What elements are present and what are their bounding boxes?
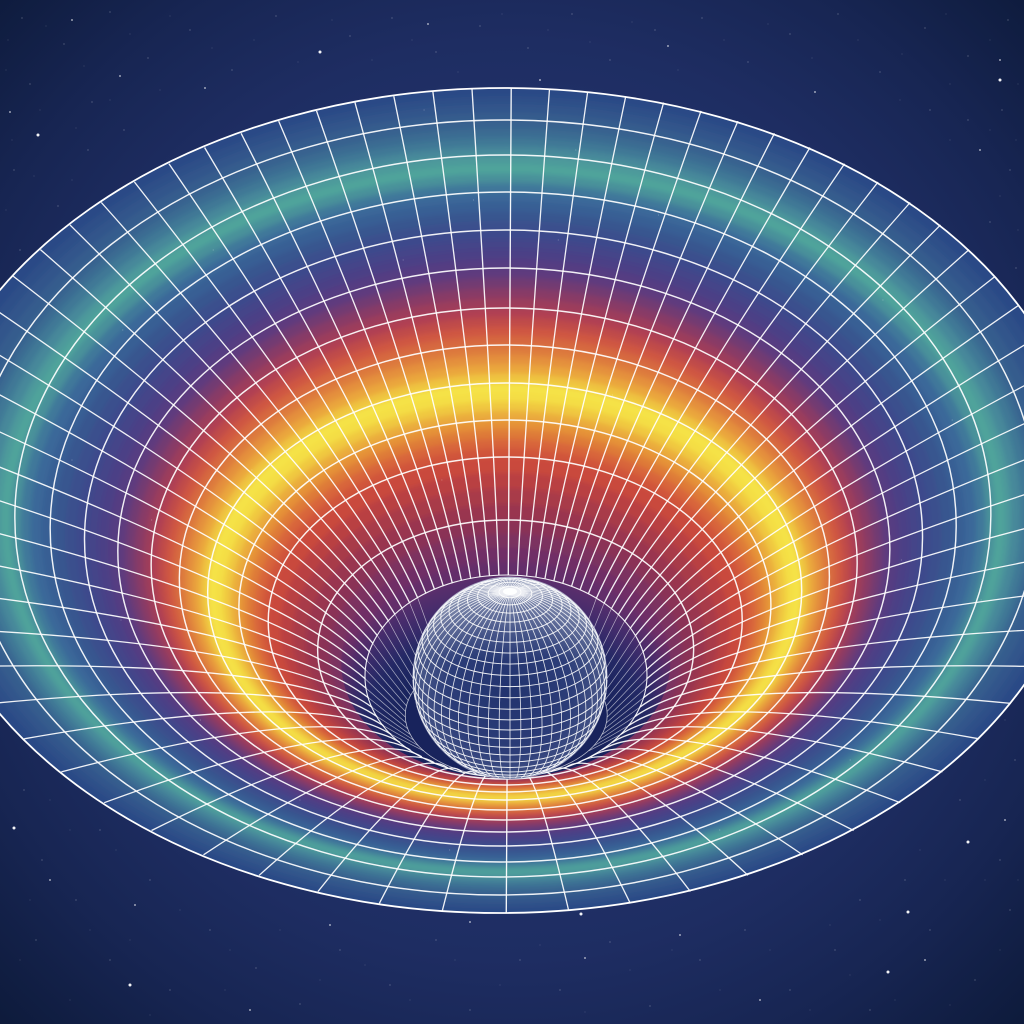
sphere outline — [413, 577, 607, 779]
central wireframe sphere — [413, 577, 607, 779]
sphere longitude lines: left — [413, 578, 510, 778]
radial grid lines: right half — [515, 89, 1024, 910]
thin radial lines inside the throat: left — [365, 598, 443, 751]
sphere top highlight — [413, 577, 607, 779]
radial grid lines: left half — [0, 89, 502, 910]
sphere pole highlight — [503, 588, 517, 595]
faint stars seen through the funnel — [70, 110, 984, 870]
radial grid lines: centre — [506, 88, 511, 913]
sphere body — [413, 577, 607, 779]
sphere latitude lines — [413, 578, 607, 777]
sphere longitude lines: centre — [509, 578, 511, 779]
sphere longitude lines: right — [510, 578, 607, 778]
dark throat of the funnel — [341, 548, 671, 778]
thin radial lines inside the throat: right — [571, 598, 647, 751]
